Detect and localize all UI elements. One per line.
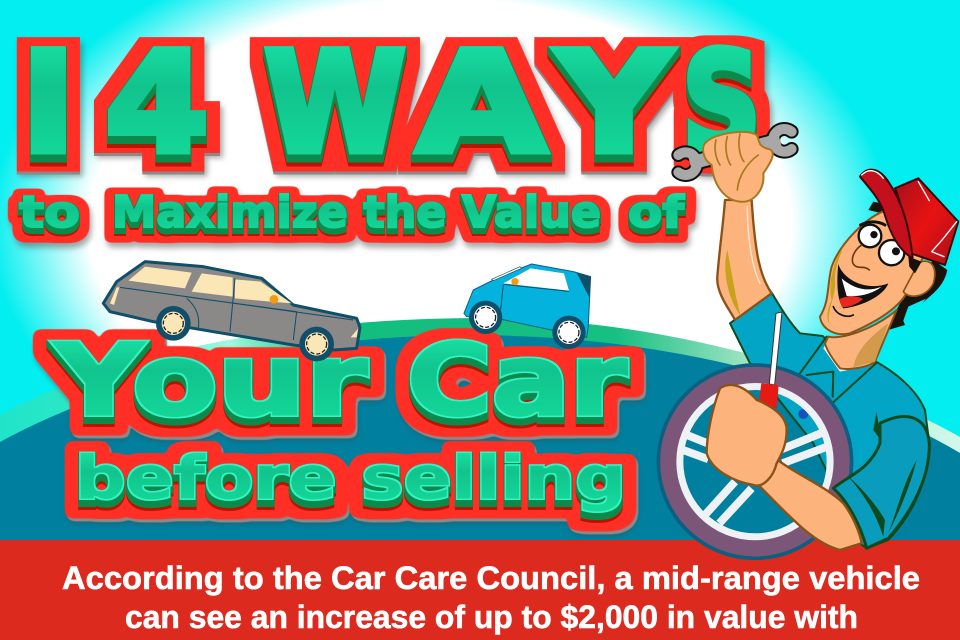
illustration: grey station wagon	[103, 262, 360, 361]
teal hill	[0, 335, 960, 640]
footer paragraph: can see an increase of up to $2,000 in value with	[125, 599, 858, 635]
headline: before selling: before selling	[75, 444, 626, 514]
rolled sleeve	[833, 412, 929, 548]
footer paragraph	[62, 560, 920, 635]
undershirt and collar	[800, 337, 876, 402]
wrench	[678, 129, 792, 175]
illustration: mechanic	[658, 129, 958, 558]
title: 14 WAYS	[21, 22, 761, 184]
title: 14 WAYS: I	[21, 22, 76, 184]
raised arm	[717, 200, 772, 320]
footer paragraph: According to the Car Care Council, a mid-range vehicle	[62, 560, 920, 596]
title: 14 WAYS: S	[682, 22, 761, 184]
headline: Your Car: Car	[407, 324, 627, 438]
head	[820, 210, 935, 334]
screwdriver	[759, 312, 782, 408]
title: 14 WAYS: A	[417, 22, 546, 184]
lower arm	[760, 457, 862, 550]
subtitle: to Maximize the Value of: to	[19, 187, 80, 238]
neck	[825, 310, 897, 369]
title: 14 WAYS: 4	[105, 22, 209, 184]
hair	[868, 202, 947, 330]
shirt torso	[730, 293, 929, 548]
red cap	[860, 170, 958, 265]
red footer band	[0, 540, 960, 640]
headline: Your Car	[53, 324, 627, 438]
illustration: small blue car	[464, 264, 591, 349]
green hill band	[0, 318, 960, 640]
title: 14 WAYS: W	[264, 22, 406, 184]
fist holding screwdriver	[707, 385, 787, 486]
hand gripping wrench	[703, 132, 773, 202]
headline: Your Car: Your	[53, 324, 367, 438]
subtitle: to Maximize the Value of: Maximize the Value	[112, 187, 601, 238]
tyre wheel	[658, 365, 852, 558]
title: 14 WAYS: Y	[555, 22, 674, 184]
subtitle: to Maximize the Value of: of	[628, 187, 685, 238]
